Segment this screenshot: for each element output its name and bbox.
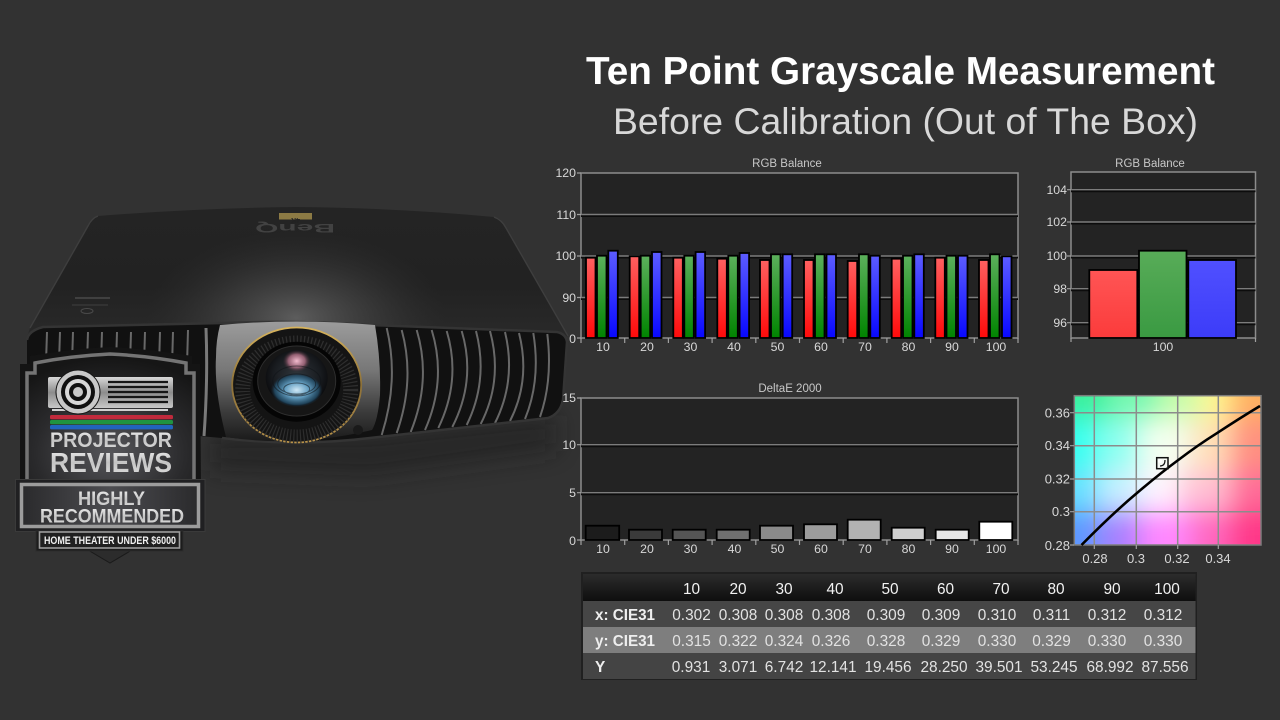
y axis labels: 0.3 [1052, 504, 1070, 519]
row: x CIE31: 0.310 [978, 607, 1016, 624]
row: Y: 3.071 [719, 659, 757, 676]
lens assembly [232, 328, 361, 442]
row: x CIE31: 0.309 [922, 607, 960, 624]
y axis labels: 96 [1053, 316, 1067, 330]
row: Y: 39.501 [975, 659, 1023, 676]
row: y CIE31: 0.330 [978, 633, 1016, 650]
y axis labels: 0 [569, 534, 576, 548]
y axis labels: 100 [555, 249, 576, 263]
x axis labels [596, 542, 1006, 556]
planckian locus curve [1082, 406, 1260, 545]
row: x CIE31: x: CIE31 [595, 607, 655, 624]
badge brand name: PROJECTOR [50, 429, 172, 452]
table header row: 20 [729, 581, 747, 598]
x axis labels: 20 [640, 542, 654, 556]
table header row [683, 581, 1180, 598]
row: Y: 6.742 [765, 659, 803, 676]
title block [586, 50, 1215, 142]
sensor dot [353, 425, 363, 435]
badge shield [20, 347, 201, 485]
y axis labels: 0.28 [1045, 538, 1070, 553]
row: y CIE31: 0.330 [1088, 633, 1126, 650]
row: Y: Y [595, 659, 606, 676]
y axis labels: 98 [1053, 282, 1067, 296]
x axis labels: 0.34 [1205, 551, 1231, 566]
row: y CIE31 [595, 633, 1182, 650]
top logo plate [279, 213, 312, 223]
lens pink reflection [283, 350, 311, 372]
x axis labels: 80 [902, 542, 915, 556]
row: Y: 28.250 [920, 659, 968, 676]
badge brand name: REVIEWS [50, 447, 172, 478]
lens blue reflection [271, 373, 323, 407]
measurement marker [1157, 458, 1168, 469]
row: x CIE31: 0.312 [1144, 607, 1182, 624]
table header row: 50 [881, 581, 899, 598]
row: y CIE31: 0.322 [719, 633, 757, 650]
row: y CIE31: 0.330 [1144, 633, 1182, 650]
chart: deltae 2000 [562, 383, 1018, 556]
y axis labels: 0.32 [1045, 472, 1070, 486]
plot area and grid [1067, 172, 1256, 342]
silver lens bezel [216, 322, 380, 441]
grid and frame [1070, 396, 1261, 549]
table outer frame and rows [581, 572, 1197, 680]
table header row: 40 [826, 581, 844, 598]
row: y CIE31: y: CIE31 [595, 633, 655, 650]
row: x CIE31: 0.302 [672, 607, 711, 624]
x axis labels: 10 [596, 542, 610, 556]
y axis labels: 5 [569, 486, 576, 500]
row: Y [595, 659, 1189, 676]
table header row: 70 [992, 581, 1010, 598]
x axis labels: 80 [902, 340, 915, 354]
row: y CIE31: 0.326 [812, 633, 850, 650]
row: y CIE31: 0.328 [867, 633, 905, 650]
y axis labels: 0.36 [1045, 406, 1070, 420]
badge colour stripes [50, 415, 173, 429]
x axis labels: 0.28 [1082, 551, 1108, 566]
row: x CIE31 [595, 607, 1182, 624]
badge projector icon [48, 370, 173, 414]
badge sub-banner: category [36, 531, 183, 551]
x axis labels: 10 [596, 340, 610, 354]
chart: rgb balance ten points [555, 158, 1018, 354]
table header row: 100 [1154, 581, 1180, 598]
y axis labels: 0 [569, 332, 576, 346]
chart title: RGB Balance [1115, 158, 1185, 170]
chart: rgb balance at 100 [1046, 158, 1256, 354]
data table [581, 572, 1197, 680]
chart title: RGB Balance [752, 158, 822, 170]
x axis labels: 100 [986, 340, 1006, 354]
x axis labels: 50 [771, 542, 784, 556]
row: x CIE31: 0.308 [812, 607, 850, 624]
x axis labels: 40 [728, 542, 741, 556]
projector top surface [26, 207, 568, 340]
bars [586, 251, 1012, 338]
y axis labels: 15 [562, 391, 576, 405]
row: x CIE31: 0.308 [765, 607, 803, 624]
badge brand name [50, 429, 172, 478]
row: Y: 19.456 [864, 659, 912, 676]
x axis labels: 60 [814, 542, 828, 556]
colour field [1075, 396, 1260, 544]
badge banner: highly recommended [16, 480, 205, 532]
badge chevron [88, 550, 132, 563]
badge sub-banner: category: HOME THEATER UNDER $6000 [44, 535, 176, 547]
row: Y: 12.141 [809, 659, 857, 676]
x axis labels: 20 [640, 340, 654, 354]
y axis labels: 110 [556, 208, 576, 222]
table header row: 80 [1047, 581, 1065, 598]
row: x CIE31: 0.311 [1033, 607, 1070, 624]
x axis labels: 90 [945, 542, 959, 556]
x axis labels: 40 [727, 340, 741, 354]
plot area and grid [577, 173, 1018, 343]
row: x CIE31: 0.308 [719, 607, 757, 624]
award badge [16, 347, 205, 563]
y axis labels: 90 [562, 291, 576, 305]
row: y CIE31: 0.329 [922, 633, 960, 650]
chart: cie chromaticity [1045, 395, 1262, 563]
plot area and grid [577, 398, 1018, 545]
y axis labels [1045, 406, 1070, 553]
table header row: 90 [1103, 581, 1121, 598]
small printed marks [72, 298, 110, 314]
y axis labels [1046, 183, 1067, 330]
row: y CIE31: 0.315 [672, 633, 711, 650]
x axis labels [1082, 551, 1231, 566]
x axis labels: 70 [858, 542, 872, 556]
y axis labels: 102 [1046, 215, 1067, 229]
x axis labels [596, 340, 1006, 354]
row: y CIE31: 0.329 [1032, 633, 1071, 650]
x axis labels: 50 [771, 340, 784, 354]
chart title: DeltaE 2000 [758, 383, 822, 395]
x axis labels: 30 [684, 340, 697, 354]
x axis labels: 60 [814, 340, 828, 354]
heading: ten point grayscale measurement: Ten Point Grayscale Measurement [586, 50, 1215, 93]
x axis labels: 0.32 [1164, 551, 1190, 566]
y axis labels: 120 [555, 166, 576, 180]
table header row: 60 [937, 581, 954, 598]
x axis labels: 70 [858, 340, 872, 354]
lens inner rings [273, 366, 321, 396]
y axis labels [562, 391, 576, 548]
row: Y: 53.245 [1030, 659, 1078, 676]
row: y CIE31: 0.324 [765, 633, 804, 650]
badge banner: highly recommended: HIGHLY [78, 489, 145, 510]
row: Y: 0.931 [672, 659, 710, 676]
bars [586, 520, 1012, 540]
BenQ logo: BenQ [255, 221, 335, 235]
projector front body with vents [27, 322, 567, 442]
y axis labels: 10 [562, 438, 576, 452]
badge banner: highly recommended: RECOMMENDED [40, 506, 184, 528]
x axis labels: 90 [945, 340, 959, 354]
row: x CIE31: 0.309 [867, 607, 905, 624]
y axis labels: 0.34 [1045, 438, 1070, 453]
subheading: before calibration: Before Calibration (Out of The Box) [613, 101, 1198, 142]
row: Y: 87.556 [1141, 659, 1189, 676]
bars [1089, 251, 1236, 338]
x axis labels: 100 [986, 542, 1006, 556]
x axis labels: 30 [684, 542, 697, 556]
top logo plate: 4K [291, 216, 300, 223]
table header row: 30 [775, 581, 793, 598]
projector photo [26, 207, 568, 476]
row: x CIE31: 0.312 [1088, 607, 1126, 624]
table header row: 10 [683, 581, 700, 598]
y axis labels [555, 166, 576, 346]
y axis labels: 100 [1046, 249, 1067, 263]
row: Y: 68.992 [1086, 659, 1134, 676]
x axis labels: 0.3 [1127, 551, 1145, 566]
projector shadow [210, 415, 556, 476]
x axis label: 100 [1153, 340, 1173, 354]
y axis labels: 104 [1046, 183, 1067, 197]
